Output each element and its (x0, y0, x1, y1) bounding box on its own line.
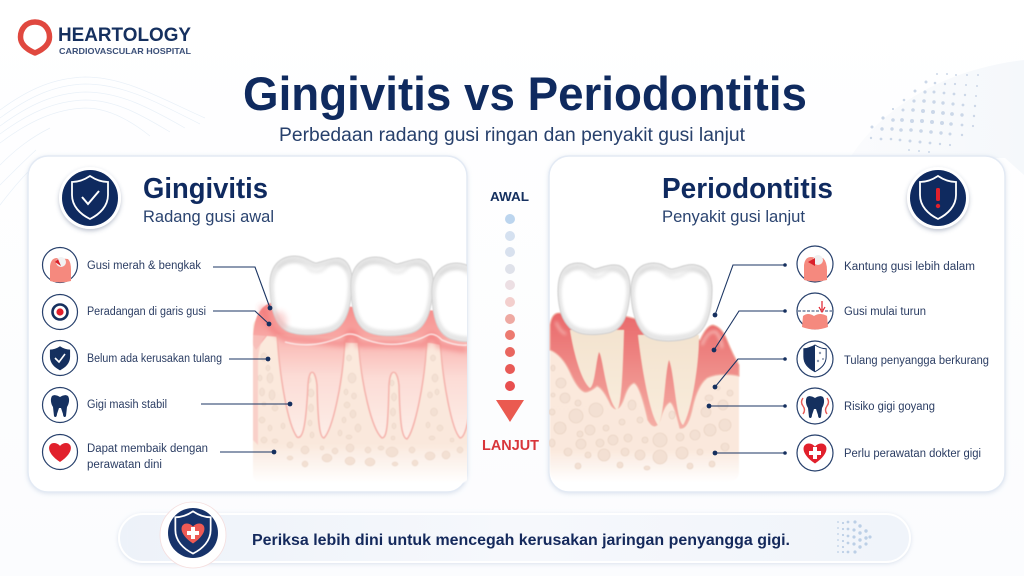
crown 1 (558, 263, 630, 335)
gum (550, 313, 739, 428)
periodontitis heading: Periodontitis (662, 173, 833, 205)
leader line (713, 263, 787, 317)
bone (253, 318, 469, 483)
callout bar (119, 514, 910, 562)
bone (550, 345, 739, 482)
label: Kantung gusi lebih dalam (844, 261, 975, 273)
background waves (0, 77, 205, 205)
label: Gusi mulai turun (844, 306, 926, 318)
label: Peradangan di garis gusi (87, 306, 206, 318)
label: Belum ada kerusakan tulang (87, 353, 222, 365)
bottom callout (119, 502, 910, 568)
icon: heart (42, 434, 78, 470)
gingivitis illustration (252, 255, 467, 483)
logo (20, 22, 191, 56)
leader line (213, 311, 271, 326)
item: gigi stabil (42, 388, 292, 422)
inflamed glow (262, 306, 467, 350)
logo name: HEARTOLOGY (58, 25, 191, 46)
periodontitis subheading: Penyakit gusi lanjut (662, 208, 805, 226)
root 1 (570, 330, 624, 410)
leader line (713, 451, 787, 455)
callout text: Periksa lebih dini untuk mencegah kerusakan jaringan penyangga gigi. (252, 532, 790, 549)
chevron dots (837, 520, 872, 554)
item: peradangan (42, 294, 271, 330)
gum highlight left (556, 322, 566, 334)
icon: target (42, 294, 78, 330)
leader line (712, 309, 787, 352)
icon: small shield (42, 340, 78, 376)
awal label: AWAL (490, 190, 529, 204)
label: Perlu perawatan dokter gigi (844, 448, 981, 460)
leader line (229, 357, 270, 361)
label: Gigi masih stabil (87, 399, 167, 411)
label: perawatan dini (87, 459, 162, 471)
icon: gum pocket (797, 246, 833, 282)
label: Dapat membaik dengan (87, 443, 208, 455)
item: gusi merah (42, 248, 272, 310)
title: Gingivitis vs Periodontitis (243, 67, 807, 120)
item: belum ada kerusakan (42, 340, 270, 376)
crown redness (271, 311, 287, 333)
panel card (549, 156, 1005, 492)
arrow (496, 400, 524, 422)
icon: tooth (42, 388, 78, 422)
gingivitis subheading: Radang gusi awal (143, 208, 274, 226)
leader line (707, 404, 787, 408)
item: perawatan dokter (713, 435, 981, 471)
logo tagline: CARDIOVASCULAR HOSPITAL (59, 46, 191, 56)
leader line (213, 267, 272, 310)
icon: red gum (42, 248, 78, 282)
label: Tulang penyangga berkurang (844, 355, 989, 367)
bone pores (549, 365, 733, 470)
panel: periodontitis (549, 156, 1005, 492)
crown 2 (351, 257, 433, 336)
progress scale (482, 190, 539, 454)
panel: gingivitis (28, 156, 514, 492)
item: gigi goyang (707, 388, 935, 424)
item: kantung gusi (713, 246, 975, 317)
panel card (28, 156, 467, 492)
logo mark (20, 22, 50, 53)
item: gusi turun (712, 293, 926, 352)
subtitle: Perbedaan radang gusi ringan dan penyakit gusi lanjut (279, 125, 746, 146)
background dots top right (850, 60, 1024, 175)
icon: receding gum (797, 293, 833, 330)
root 2 (638, 335, 699, 425)
gum left edge (253, 335, 266, 445)
icon: wobbling tooth (797, 388, 833, 424)
icon: half shield (797, 341, 833, 377)
crown 1 (270, 256, 352, 335)
tooth root 2 (358, 338, 427, 439)
icon: heart cross (797, 435, 833, 471)
leader line (201, 402, 292, 406)
periodontitis illustration (549, 263, 739, 482)
label: Risiko gigi goyang (844, 401, 935, 413)
gum band (253, 303, 467, 350)
badge: shield heart (160, 502, 226, 568)
badge: shield check (59, 167, 121, 229)
tooth root 3 (440, 338, 470, 438)
bone pores (258, 353, 463, 467)
leader line (220, 450, 276, 454)
gingivitis heading: Gingivitis (143, 173, 268, 205)
crown 3 (432, 262, 467, 342)
progress dots (505, 214, 515, 391)
lanjut label: LANJUT (482, 437, 539, 454)
gum highlight right (702, 332, 722, 348)
badge: shield alert (907, 167, 969, 229)
item: dapat membaik (42, 434, 276, 471)
leader line (713, 357, 787, 389)
gum highlight line (285, 334, 467, 345)
tooth root 1 (277, 335, 345, 438)
item: tulang berkurang (713, 341, 989, 389)
crown 2 (631, 263, 712, 341)
label: Gusi merah & bengkak (87, 260, 201, 272)
